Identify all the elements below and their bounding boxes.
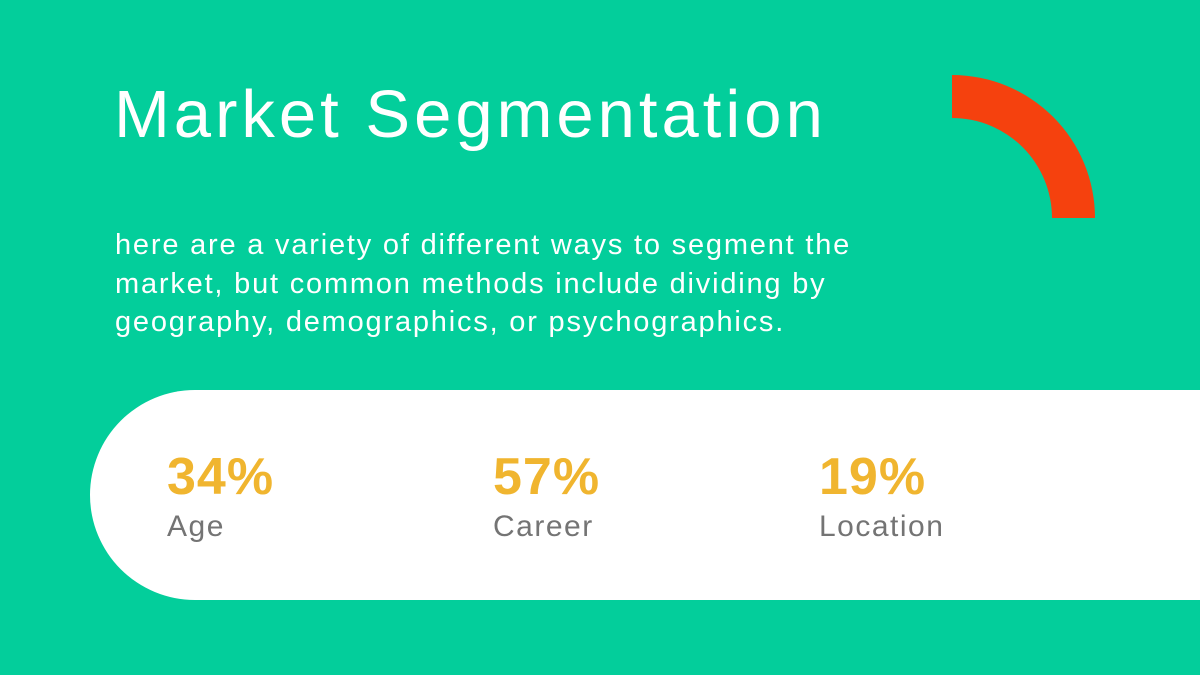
stat: career: Career bbox=[493, 510, 594, 543]
stat: location: 19% bbox=[819, 448, 926, 506]
icon: quarter ring bbox=[952, 75, 1095, 218]
stat: career bbox=[493, 448, 600, 543]
stat: career: 57% bbox=[493, 448, 600, 506]
stat: age: Age bbox=[167, 510, 225, 543]
text block: description: geography, demographics, or psychographics. bbox=[115, 306, 785, 338]
stat: location: Location bbox=[819, 510, 944, 543]
stat: age: 34% bbox=[167, 448, 274, 506]
text block: description: market, but common methods include dividing by bbox=[115, 268, 826, 300]
text block: description: here are a variety of different ways to segment the bbox=[115, 229, 851, 261]
stat: age bbox=[167, 448, 274, 543]
panel: stats bbox=[90, 390, 1200, 600]
stat: location bbox=[819, 448, 944, 543]
text block: description bbox=[115, 229, 851, 338]
title: Market Segmentation bbox=[114, 77, 827, 152]
